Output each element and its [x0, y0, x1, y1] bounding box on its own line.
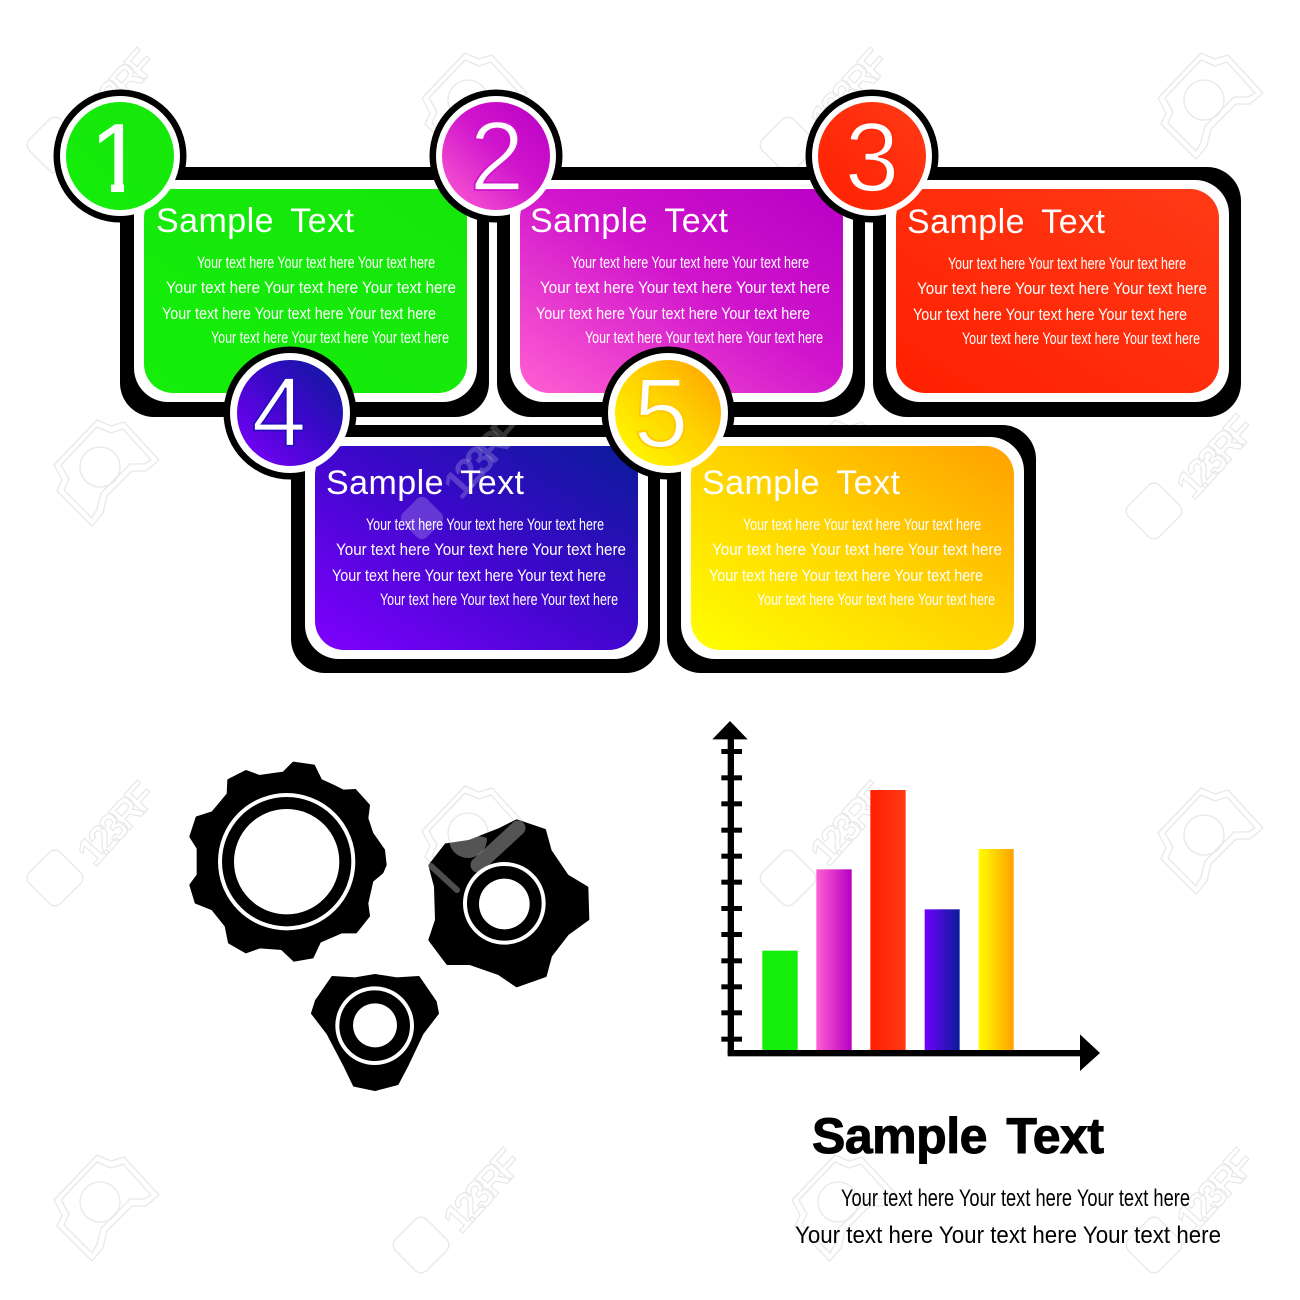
panel 2 text block [536, 254, 830, 347]
badge 1 [60, 96, 180, 216]
icon: small gear [312, 975, 438, 1090]
panel 2 text block: Your text here Your text here Your text here [536, 305, 810, 323]
panel 5 text block: Your text here Your text here Your text here [743, 516, 981, 534]
icon: large gear [190, 763, 386, 961]
watermark pattern: 123RF [69, 774, 165, 874]
y axis with ticks [712, 721, 748, 1055]
chart caption: Your text here Your text here Your text here [795, 1222, 1221, 1249]
panel 5 frame [602, 346, 1036, 673]
panel 1 text block: Your text here Your text here Your text here [197, 254, 435, 272]
badge 4: 4 [252, 357, 306, 467]
watermark pattern: 123RF [802, 41, 898, 141]
panel 2 text block: Your text here Your text here Your text here [571, 254, 809, 272]
panel 4 text block: Your text here Your text here Your text here [332, 567, 606, 585]
watermark pattern: 123RF [1168, 407, 1264, 507]
watermark pattern: 123RF [802, 774, 898, 874]
badge 1: 1 [90, 103, 144, 213]
panel 4 text block: Your text here Your text here Your text here [366, 516, 604, 534]
watermark pattern: 123RF [1168, 1141, 1264, 1241]
panel 5: yellow-orange [602, 346, 1036, 673]
panel 3 text block: Your text here Your text here Your text here [962, 330, 1200, 348]
panel 5 text block: Your text here Your text here Your text here [757, 591, 995, 609]
panel 5 text block: Your text here Your text here Your text here [709, 567, 983, 585]
panel 4 text block: Your text here Your text here Your text here [336, 541, 626, 559]
badge 2: 2 [470, 101, 524, 211]
icon: medium gear [429, 820, 588, 986]
badge 2 [436, 96, 556, 216]
panel 3 heading: Sample Text [907, 203, 1106, 241]
watermark over indigo panel [398, 407, 531, 542]
watermark over medium gear [431, 828, 518, 890]
bar: indigo [925, 909, 960, 1051]
watermark pattern: 123RF [435, 1141, 531, 1241]
panel 1: green [54, 90, 489, 417]
chart caption: Your text here Your text here Your text here [841, 1185, 1190, 1212]
bar: yellow [979, 849, 1014, 1051]
panel 1 heading: Sample Text [156, 202, 355, 240]
panel 4 text block [332, 516, 626, 609]
panel 2 text block: Your text here Your text here Your text here [540, 279, 830, 297]
panel 3 text block: Your text here Your text here Your text here [917, 280, 1207, 298]
watermark over indigo panel: 123RF [435, 407, 531, 507]
panel 3 text block [913, 255, 1207, 348]
panel 1 text block: Your text here Your text here Your text here [166, 279, 456, 297]
panel 2: magenta [430, 90, 865, 417]
badge 5 [608, 353, 728, 473]
panel 4 frame [224, 346, 660, 673]
panel 5 text block [709, 516, 1002, 609]
badge 3 [812, 96, 932, 216]
panel 5 text block: Your text here Your text here Your text here [712, 541, 1002, 559]
bar: red [870, 790, 906, 1051]
panel 4 heading: Sample Text [326, 464, 525, 502]
bar chart [712, 721, 1100, 1071]
panel 1 text block: Your text here Your text here Your text here [162, 305, 436, 323]
panel 4: indigo [224, 346, 660, 673]
panel 2 heading: Sample Text [530, 202, 729, 240]
panel 3: red [806, 90, 1241, 417]
icon: gears [190, 763, 588, 1090]
x axis arrow [728, 1034, 1100, 1071]
panel 1 frame [54, 90, 489, 417]
badge 5: 5 [634, 358, 688, 468]
panel 4 text block: Your text here Your text here Your text here [380, 591, 618, 609]
panel 2 text block: Your text here Your text here Your text here [585, 329, 823, 347]
chart caption [795, 1185, 1221, 1249]
panel 3 frame [806, 90, 1241, 417]
panel 3 text block: Your text here Your text here Your text here [913, 306, 1187, 324]
chart heading: Sample Text [812, 1108, 1104, 1164]
bar: green [762, 951, 798, 1051]
panel 1 text block: Your text here Your text here Your text here [211, 329, 449, 347]
panel 5 heading: Sample Text [702, 464, 901, 502]
badge 4 [230, 353, 350, 473]
panel 3 text block: Your text here Your text here Your text here [948, 255, 1186, 273]
badge 3: 3 [845, 102, 899, 212]
panel 2 frame [430, 90, 865, 417]
bar: magenta [816, 869, 852, 1051]
panel 1 text block [162, 254, 456, 347]
watermark pattern: 123RF [69, 41, 165, 141]
